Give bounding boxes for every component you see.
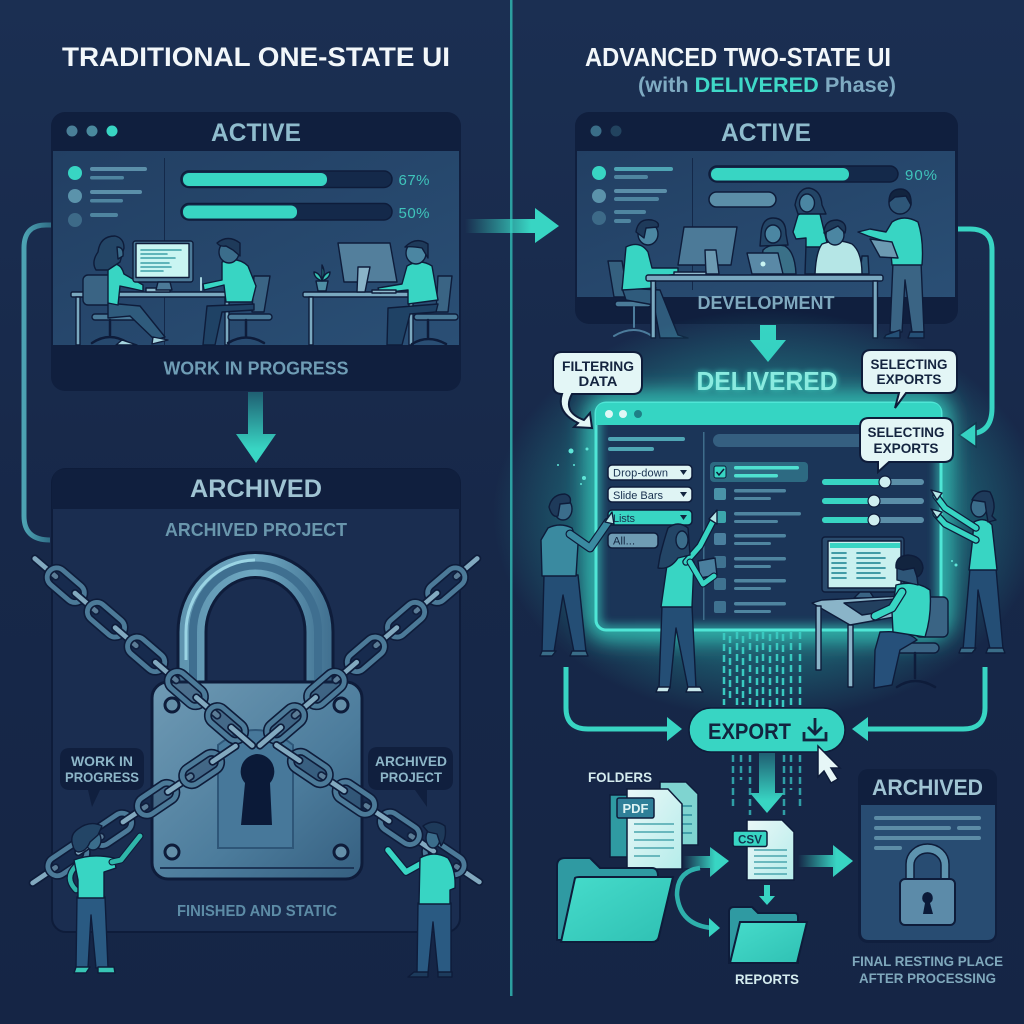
person: right reaching at sliders	[931, 490, 1005, 653]
center divider	[510, 0, 512, 996]
subheading: archived project: ARCHIVED PROJECT	[165, 520, 347, 540]
caption: final resting place: AFTER PROCESSING	[859, 970, 996, 986]
control: lists	[608, 510, 692, 525]
window dots delivered	[605, 410, 642, 418]
desk right	[303, 292, 420, 345]
panel: left archived	[52, 469, 460, 932]
icon: large padlock	[152, 552, 362, 879]
control: all: All...	[613, 536, 635, 548]
panel: right active window	[575, 112, 958, 324]
arrow head: loop into delivered	[959, 423, 976, 447]
main document	[627, 789, 682, 869]
person: man at right desk	[372, 241, 458, 345]
chain: lower right	[269, 735, 487, 892]
window dots	[66, 126, 118, 136]
callout: selecting exports upper: EXPORTS	[876, 371, 942, 387]
person: man in light shirt	[815, 220, 869, 274]
sliders	[822, 476, 924, 526]
progress bar 67%	[181, 171, 430, 189]
callout: selecting exports upper: SELECTING	[870, 356, 948, 372]
data stream: export to csv	[733, 755, 800, 815]
progress bar 50%	[181, 204, 430, 222]
callout: selecting exports lower	[860, 418, 953, 472]
text lines	[874, 816, 981, 850]
button: export	[689, 708, 845, 752]
lock screws	[165, 698, 348, 859]
icon: folders with pdf documents	[557, 782, 698, 942]
callout: work in progress: WORK IN	[71, 753, 133, 769]
desk left	[71, 292, 233, 345]
callout: selecting exports lower: EXPORTS	[874, 440, 938, 456]
progress bar 67%: 67%	[398, 172, 430, 189]
caption: finished and static: FINISHED AND STATIC	[177, 903, 337, 920]
glow around delivered window	[493, 310, 1024, 720]
callout: selecting exports lower: SELECTING	[868, 424, 945, 440]
arrow head: right into export	[852, 717, 868, 741]
progress bar 90%	[709, 166, 937, 184]
control: lists: Lists	[613, 513, 636, 525]
arrow: folders to csv	[683, 847, 729, 877]
data stream: delivered to export	[724, 632, 800, 712]
secondary progress pill	[709, 192, 776, 207]
window dots right	[590, 126, 622, 136]
heading: archived right: ARCHIVED	[872, 775, 983, 800]
heading: active right: ACTIVE	[721, 119, 811, 147]
pdf label: PDF	[622, 801, 649, 816]
desk: delivered workstation	[812, 596, 905, 687]
chain: lower left	[25, 736, 243, 893]
back document	[660, 782, 698, 845]
control: drop-down: Drop-down	[613, 468, 668, 480]
footer label: development: DEVELOPMENT	[698, 293, 835, 313]
chain: upper left	[26, 549, 261, 755]
caption: final resting place	[852, 953, 1003, 986]
computer: delivered monitor	[822, 537, 904, 598]
arrow: csv to reports	[759, 885, 775, 905]
chain: upper right	[251, 549, 486, 755]
person: woman pointing at list	[656, 510, 717, 692]
arrow: export down to csv	[750, 753, 784, 813]
title bar	[596, 403, 941, 425]
person: woman at computer	[83, 236, 170, 345]
heading: archived: ARCHIVED	[190, 475, 322, 503]
title: traditional one-state UI: TRADITIONAL ONE-STATE UI	[62, 42, 450, 72]
panel: left active window	[51, 112, 461, 391]
sidebar list	[68, 158, 165, 345]
callout: filtering data: DATA	[578, 373, 618, 389]
control: slide bars: Slide Bars	[613, 490, 664, 502]
icon: csv document	[733, 820, 794, 880]
callout: archived project	[368, 747, 453, 807]
icon: small padlock	[900, 844, 955, 925]
panel: right archived	[858, 769, 997, 943]
person: left pointing at lists	[540, 494, 614, 656]
progress bar 50%: 50%	[398, 205, 430, 222]
arrow: csv to archived	[798, 845, 853, 877]
computer: monitor with text	[133, 241, 193, 290]
caption: final resting place: FINAL RESTING PLACE	[852, 953, 1003, 969]
folder tab teal	[610, 795, 630, 857]
label: folders: FOLDERS	[588, 769, 652, 785]
control: all	[608, 533, 658, 548]
icon: mouse cursor	[818, 746, 840, 783]
control: slide bars	[608, 487, 692, 502]
person: woman standing	[793, 188, 828, 274]
checklist	[710, 462, 808, 613]
label: reports: REPORTS	[735, 971, 799, 987]
pdf label	[617, 798, 654, 818]
icon: reports folder	[729, 907, 807, 963]
icon: download	[804, 718, 826, 740]
arrow: development to delivered	[750, 325, 786, 362]
large folder	[557, 858, 673, 942]
callout: work in progress	[60, 748, 144, 807]
arrow: right into export	[860, 667, 985, 729]
progress bar 90%: 90%	[905, 167, 937, 184]
title: advanced two-state UI: ADVANCED TWO-STATE UI	[585, 44, 891, 72]
person: pulling chain left	[70, 824, 140, 973]
callout: selecting exports upper	[862, 350, 957, 408]
sidebar header	[608, 432, 704, 620]
panel: delivered window	[596, 403, 941, 630]
person: seated man at delivered desk	[874, 555, 948, 688]
person: seated developer	[608, 220, 688, 338]
callout: archived project: PROJECT	[380, 769, 442, 785]
arrow: right loop to delivered	[958, 229, 992, 434]
plant	[314, 265, 330, 291]
desk: development	[646, 275, 883, 338]
arrow: folders to reports	[677, 868, 720, 937]
person: man standing with tablet	[858, 189, 924, 338]
callout: filtering data	[553, 352, 642, 428]
sparkle particles	[557, 448, 958, 566]
arrow head: left into export	[667, 717, 682, 741]
person: woman with laptop	[747, 218, 796, 274]
computer: rear monitor	[674, 227, 737, 275]
callout: work in progress: PROGRESS	[65, 769, 139, 785]
heading: delivered: DELIVERED	[696, 366, 838, 396]
button: export: EXPORT	[708, 719, 792, 744]
sidebar right	[592, 158, 693, 290]
arrow: left into export	[566, 667, 675, 729]
csv label: CSV	[738, 832, 762, 846]
team scene: development	[608, 188, 924, 338]
person: pulling chain right	[388, 822, 455, 977]
callout: filtering data: FILTERING	[562, 358, 634, 374]
control: drop-down	[608, 465, 692, 480]
arrow: active down to archived	[236, 392, 276, 463]
footer: work in progress: WORK IN PROGRESS	[164, 358, 348, 378]
heading: delivered: DELIVERED	[696, 366, 838, 396]
subtitle: with delivered phase: (with DELIVERED Phase)	[638, 74, 896, 97]
callout: archived project: ARCHIVED	[375, 753, 447, 769]
person: seated man writing	[201, 238, 272, 345]
search bar	[713, 434, 873, 447]
keyhole	[241, 754, 274, 825]
computer: monitor rear	[338, 243, 397, 292]
heading: active: ACTIVE	[211, 119, 301, 147]
arrow: active to two-state UI	[465, 208, 559, 243]
arrow: left loop from active to archived	[24, 225, 51, 540]
